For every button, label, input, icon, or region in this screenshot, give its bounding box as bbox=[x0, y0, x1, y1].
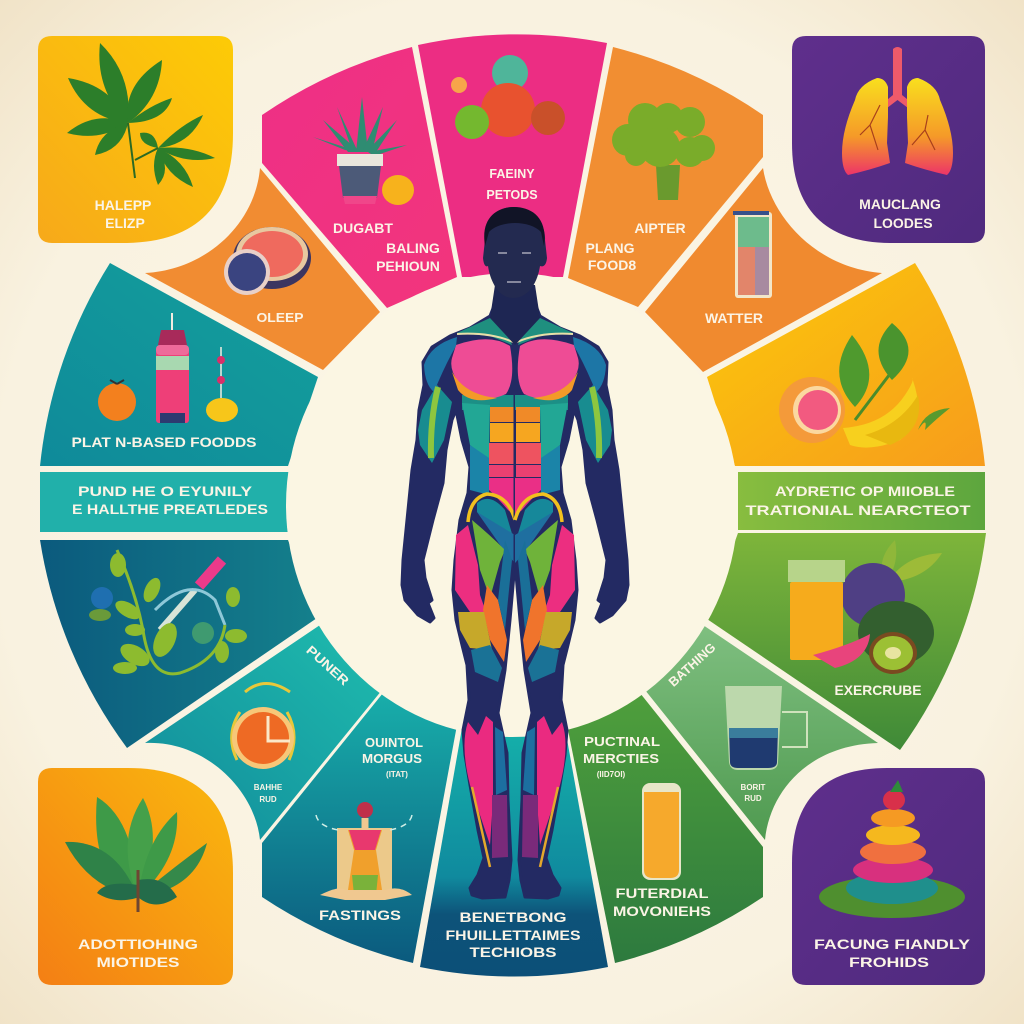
text: small label: BAHHE bbox=[254, 783, 283, 792]
text: corner label: ADOTTIOHING bbox=[78, 936, 198, 952]
segment: water orange bbox=[645, 168, 882, 372]
icon: measuring cup bbox=[725, 686, 807, 770]
text: small label: RUD bbox=[259, 795, 277, 804]
text: corner label: LOODES bbox=[873, 215, 933, 231]
hair bbox=[484, 207, 545, 246]
text: corner label: FROHIDS bbox=[849, 954, 929, 970]
icon: leaves bbox=[65, 797, 207, 912]
text: corner label: ELIZP bbox=[105, 215, 145, 231]
text: segment label: BALING bbox=[386, 240, 440, 256]
icon: yoga figure bbox=[316, 802, 412, 900]
segment: broccoli orange bbox=[568, 47, 763, 307]
text: label bottom: FASTINGS bbox=[319, 907, 401, 923]
text: label top: MORGUS bbox=[362, 751, 422, 766]
text: label top: MERCTIES bbox=[583, 751, 659, 766]
text: segment label: PLAT N-BASED FOODDS bbox=[72, 434, 256, 450]
head bbox=[483, 207, 547, 298]
body left half bbox=[402, 298, 515, 898]
text: label top: (IID7OI) bbox=[597, 770, 626, 779]
text: label top: (ITAT) bbox=[386, 770, 408, 779]
face features bbox=[498, 253, 531, 282]
segment: teal band bbox=[40, 472, 290, 532]
text: label top: OUINTOL bbox=[365, 735, 423, 750]
icon: juice and kiwi bbox=[788, 540, 942, 674]
text: segment label: BENETBONG bbox=[460, 909, 567, 925]
text: segment label: PLANG bbox=[586, 240, 635, 256]
text: segment label: FAEINY bbox=[489, 167, 535, 181]
text: label bottom: FUTERDIAL bbox=[616, 885, 709, 901]
text: segment label: EXERCRUBE bbox=[834, 682, 922, 698]
icon: potted plant bbox=[313, 97, 414, 205]
icon: fruits bbox=[451, 55, 565, 139]
text: band label: TRATIONIAL NEARCTEOT bbox=[746, 502, 971, 518]
neck bbox=[490, 285, 540, 345]
text: band label: E HALLTHE PREATLEDES bbox=[72, 501, 268, 517]
text: segment label: PETODS bbox=[486, 188, 538, 202]
text: segment label: AIPTER bbox=[634, 220, 686, 236]
icon: broccoli bbox=[612, 103, 715, 200]
icon: herbs and syringe bbox=[89, 550, 247, 674]
icon: shake and fruit bbox=[98, 313, 238, 423]
icon: alarm clock bbox=[232, 684, 294, 769]
text: corner label: FACUNG FIANDLY bbox=[814, 936, 971, 952]
segment: plant pink bbox=[262, 47, 457, 308]
text: segment label: TECHIOBS bbox=[470, 944, 556, 960]
text: label top: PUCTINAL bbox=[584, 734, 660, 749]
icon: water bottle bbox=[733, 211, 772, 298]
panel: corner top left bbox=[38, 36, 233, 243]
body right half bbox=[515, 298, 628, 898]
segment: teal plant foods bbox=[40, 263, 318, 466]
text: segment label: WATTER bbox=[705, 310, 763, 326]
segment: cup light green bbox=[645, 625, 878, 840]
text: small label: BORIT bbox=[741, 783, 766, 792]
text: segment label: FHUILLETTAIMES bbox=[446, 927, 580, 943]
figure: human body with muscles bbox=[402, 207, 628, 898]
segment: teal left bottom bbox=[262, 693, 457, 963]
segment: leaf dark teal bbox=[40, 540, 317, 748]
icon: lungs bbox=[842, 47, 953, 175]
text: corner label: MIOTIDES bbox=[96, 954, 180, 970]
segment: clock light teal bbox=[145, 625, 382, 840]
icon: beaker bbox=[642, 783, 681, 880]
panel: corner top right bbox=[792, 36, 985, 243]
text: segment label: PEHIOUN bbox=[376, 258, 440, 274]
text: segment label: DUGABT bbox=[333, 220, 393, 236]
icon: green leaf plant bbox=[67, 43, 215, 187]
text: band label: PUND HE O EYUNILY bbox=[78, 483, 253, 499]
segment: test tube green bbox=[567, 693, 763, 963]
text: segment tag: PUNER bbox=[303, 642, 353, 689]
segment: juice green bbox=[707, 533, 986, 750]
text: corner label: HALEPP bbox=[95, 197, 151, 213]
inner circle bbox=[286, 273, 738, 737]
text: segment label: OLEEP bbox=[256, 310, 304, 325]
text: band label: AYDRETIC OP MIIOBLE bbox=[775, 483, 955, 499]
panel: corner bottom left bbox=[38, 768, 233, 985]
segment: foods pink bbox=[418, 34, 607, 277]
segment: green band bbox=[738, 472, 985, 530]
segment: fruit yellow bbox=[707, 263, 985, 466]
panel: corner bottom right bbox=[792, 768, 985, 985]
text: corner label: MAUCLANG bbox=[859, 196, 941, 212]
segment: teal center bottom bbox=[420, 728, 608, 976]
text: label bottom: MOVONIEHS bbox=[613, 903, 711, 919]
text: segment tag: BATHING bbox=[665, 640, 719, 690]
icon: plate of food bbox=[224, 227, 311, 295]
icon: stacked rings bbox=[819, 780, 965, 918]
icon: grapefruit, leaves, bananas bbox=[779, 323, 950, 448]
text: small label: RUD bbox=[744, 794, 762, 803]
segment: sleep orange bbox=[145, 168, 380, 370]
text: segment label: FOOD8 bbox=[588, 257, 636, 273]
